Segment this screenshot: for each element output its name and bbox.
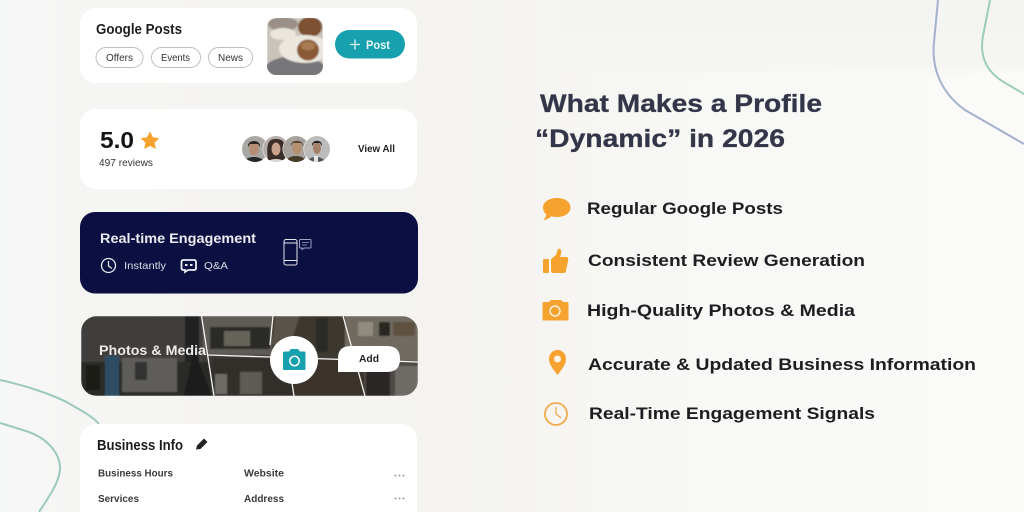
list item: high-quality photos & media <box>542 300 856 320</box>
link: view all: View All <box>358 143 395 155</box>
rating score: 5.0 <box>100 127 134 153</box>
list item: accurate & updated business information <box>549 350 976 375</box>
image: food photo <box>267 18 323 75</box>
list item: consistent review generation: Consistent Review Generation <box>588 251 865 270</box>
panel: real-time engagement <box>80 212 418 294</box>
icon: pencil <box>196 438 208 450</box>
label: business hours: Business Hours <box>98 468 173 480</box>
icon: thumbs up <box>543 249 568 273</box>
button: post: Post <box>366 38 390 52</box>
photo collage <box>81 316 418 396</box>
list item: regular google posts <box>543 198 783 220</box>
icon: map pin <box>549 350 566 375</box>
pill: news: News <box>218 52 243 64</box>
reviews count: 497 reviews <box>99 157 153 169</box>
heading: google posts: Google Posts <box>96 22 182 38</box>
button: add <box>338 346 400 372</box>
list item: consistent review generation <box>543 249 865 273</box>
label: services: Services <box>98 493 139 505</box>
label: q&a: Q&A <box>204 260 228 272</box>
list item: real-time engagement signals <box>545 403 875 425</box>
icon: chat <box>182 260 196 272</box>
title: “Dynamic” in 2026 <box>535 125 785 153</box>
decorative curve: left upper <box>0 380 99 424</box>
label: instantly: Instantly <box>124 260 167 272</box>
pill: news <box>208 48 252 68</box>
pill: events <box>152 48 200 68</box>
pill: events: Events <box>161 52 190 64</box>
icon: camera button <box>270 336 318 384</box>
icon: camera <box>542 300 568 320</box>
pill: offers: Offers <box>106 52 133 64</box>
list item: real-time engagement signals: Real-Time Engagement Signals <box>589 404 875 423</box>
list item: regular google posts: Regular Google Posts <box>587 199 783 218</box>
avatars <box>242 136 330 162</box>
decorative curve: top right green <box>982 0 1024 94</box>
label: address: Address <box>244 493 284 505</box>
collage dividers <box>202 316 418 396</box>
heading: real-time engagement: Real-time Engagement <box>100 231 257 246</box>
more dots: row one <box>394 474 404 476</box>
icon: star <box>141 132 159 149</box>
button: add: Add <box>359 353 379 365</box>
label: website: Website <box>244 468 284 480</box>
label: photos & media: Photos & Media <box>99 343 207 358</box>
decorative curve: left lower <box>0 423 60 512</box>
button: post <box>335 30 405 58</box>
pill: offers <box>96 48 143 68</box>
panel: rating <box>80 109 417 189</box>
icon: clock <box>102 258 116 272</box>
title: What Makes a Profile <box>540 90 822 118</box>
panel: google posts <box>80 8 417 88</box>
icon: phone with message <box>284 240 311 265</box>
heading: business info: Business Info <box>97 438 183 454</box>
more dots: row two <box>394 498 404 500</box>
panel: photos and media <box>81 316 418 396</box>
decorative curve: top right blue <box>934 0 1024 144</box>
list item: accurate & updated business information: Accurate & Updated Business Information <box>588 355 976 374</box>
icon: clock <box>545 403 567 425</box>
list item: high-quality photos & media: High-Quality Photos & Media <box>587 301 856 320</box>
title <box>535 90 822 153</box>
icon: speech bubble <box>543 198 570 220</box>
panel: business info <box>80 424 417 512</box>
